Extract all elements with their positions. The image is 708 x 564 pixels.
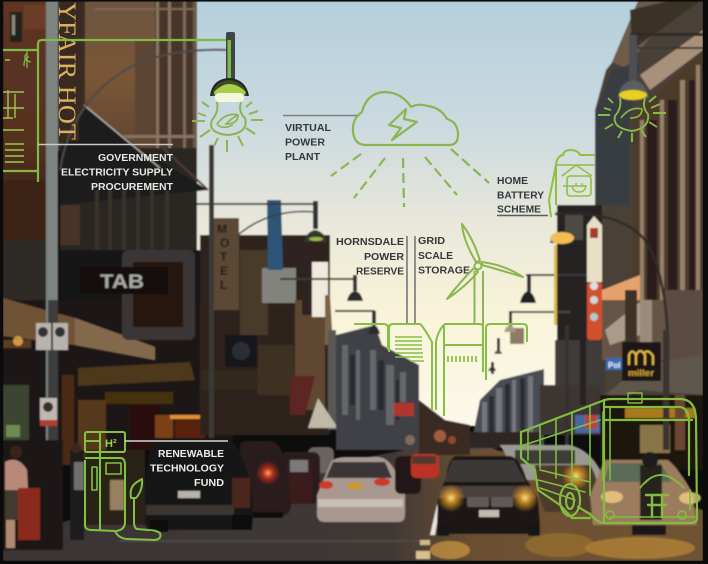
TAB sign: TAB bbox=[100, 272, 144, 293]
label: grid scale storage: SCALE bbox=[418, 250, 453, 262]
icon: right street lamp bulb bbox=[598, 96, 666, 142]
road bbox=[3, 445, 703, 561]
icon: dashed power lines bbox=[331, 149, 489, 207]
label: virtual power plant: POWER bbox=[285, 136, 325, 148]
icon: electric bus bbox=[521, 393, 697, 523]
label: renewable technology fund: TECHNOLOGY bbox=[150, 462, 224, 474]
car: silver behind bus bbox=[500, 445, 600, 480]
icon: hydrogen charging station bbox=[85, 432, 160, 540]
label: government electricity supply procurement: ELECTRICITY SUPPLY bbox=[61, 166, 173, 178]
label: virtual power plant: VIRTUAL bbox=[285, 122, 332, 134]
label: renewable technology fund: FUND bbox=[194, 477, 224, 489]
car: right side silver bbox=[590, 460, 697, 525]
label: home battery scheme: BATTERY bbox=[497, 190, 544, 202]
car: silver sedan bbox=[317, 457, 405, 522]
car: background row bbox=[308, 447, 334, 473]
label: virtual power plant: PLANT bbox=[285, 151, 321, 163]
icon: grid scale storage units bbox=[354, 324, 527, 416]
label: renewable technology fund: RENEWABLE bbox=[158, 448, 224, 460]
icon: government building and supply lines bbox=[3, 40, 228, 182]
lower left shopfronts bbox=[3, 298, 285, 465]
centre left buildings bbox=[200, 200, 338, 435]
red column sign bbox=[587, 216, 602, 340]
car: BMW bbox=[437, 456, 540, 534]
miller sign bbox=[622, 342, 661, 381]
label: hornsdale power reserve: POWER bbox=[364, 251, 404, 263]
icon: cloud with lightning bbox=[353, 92, 458, 145]
label: renewable technology fund bbox=[125, 441, 228, 489]
cars bbox=[145, 438, 701, 536]
label: grid scale storage: GRID bbox=[418, 235, 445, 247]
MOTEL sign: E bbox=[220, 264, 228, 278]
label: home battery scheme: SCHEME bbox=[497, 204, 541, 216]
icon: street lamp with light bulb bbox=[192, 32, 263, 152]
MOTEL sign: L bbox=[220, 278, 227, 292]
label: grid scale storage: STORAGE bbox=[418, 264, 470, 276]
hotel vertical sign text: YFAIR HOT bbox=[53, 2, 80, 140]
right buildings bbox=[540, 1, 703, 470]
label: government electricity supply procurement: GOVERNMENT bbox=[98, 152, 174, 164]
car: dark suv second bbox=[240, 441, 291, 516]
left building bbox=[3, 1, 208, 350]
TAB sign bbox=[80, 250, 195, 340]
centre distance buildings bbox=[336, 325, 544, 455]
label: virtual power plant bbox=[283, 116, 358, 163]
MOTEL sign: T bbox=[220, 250, 228, 264]
label: hornsdale power reserve: RESERVE bbox=[356, 266, 404, 278]
blue Pol sign bbox=[606, 358, 622, 370]
car: red and dark row bbox=[395, 456, 421, 494]
icon: wind turbine bbox=[447, 224, 523, 325]
MOTEL sign: O bbox=[220, 236, 229, 250]
car: black SUV bbox=[145, 438, 253, 530]
label: government electricity supply procurement: PROCUREMENT bbox=[91, 181, 174, 193]
label: hornsdale power reserve bbox=[336, 236, 407, 323]
MOTEL sign: M bbox=[217, 222, 227, 236]
car: orange lit bbox=[535, 465, 600, 512]
pedestrians bbox=[3, 440, 145, 550]
sky bbox=[190, 1, 640, 426]
label: home battery scheme: HOME bbox=[497, 175, 528, 187]
icon: home battery bbox=[549, 150, 595, 217]
blue Pol sign: Pol bbox=[608, 361, 620, 370]
miller sign: miller bbox=[628, 368, 655, 378]
icon: hydrogen charging station: H² bbox=[105, 438, 117, 450]
label: government electricity supply procurement bbox=[38, 144, 174, 193]
label: grid scale storage bbox=[415, 235, 470, 323]
label: hornsdale power reserve: HORNSDALE bbox=[336, 236, 404, 248]
label: home battery scheme bbox=[497, 175, 548, 216]
MOTEL sign bbox=[212, 218, 239, 310]
